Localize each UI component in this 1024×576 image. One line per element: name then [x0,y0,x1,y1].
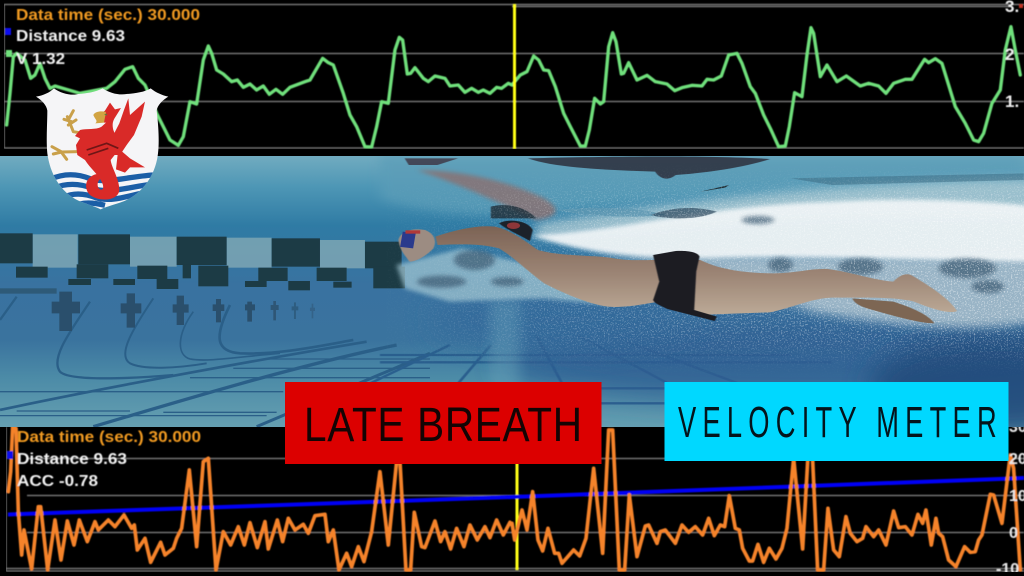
y axis labels: 0 [1009,525,1018,542]
shaft of light [490,300,520,390]
legend swatch: distance [7,451,13,459]
floor crosses [52,292,315,331]
lane rope light floats [33,234,365,268]
griffin hind fin [116,148,145,173]
corner marker [1019,4,1023,8]
readout: velocity: V 1.32 [16,51,65,68]
swim trunks [653,251,717,321]
acceleration curve [8,427,1020,570]
photo top edge [0,153,1024,156]
y axis labels [996,419,1024,576]
spray shadows [417,216,1004,293]
hand [398,229,435,262]
pool floor right side lines [370,344,737,404]
readout: distance: Distance 9.63 [17,451,127,468]
y axis labels [1005,0,1019,111]
pool floor and lane lines [0,297,430,427]
surface reflection and foam [380,155,1024,327]
distance line [8,478,1024,514]
top chart: velocity [0,0,1024,155]
readout: data time: Data time (sec.) 30.000 [16,7,200,24]
label: velocity meter [664,382,1008,461]
readout: distance: Distance 9.63 [16,28,125,45]
glove strap [400,232,416,248]
y axis labels: 2 [1005,45,1014,64]
photo: underwater swimmer [0,150,1024,435]
grid lines [4,4,1024,148]
legend swatch: velocity [6,50,12,57]
waves [50,175,153,205]
swimmer [398,221,957,323]
label: late breath: LATE BREATH [304,399,582,452]
water spray speckles [415,174,1024,369]
far leg [852,298,934,323]
velocity curve [7,27,1020,147]
griffin body, neck and tail [75,103,121,199]
head and cap [499,221,533,241]
griffin [52,98,145,199]
label: velocity meter: VELOCITY METER [678,397,997,447]
label: late breath [285,382,602,464]
legend swatch: distance [5,28,11,35]
readout: acceleration: ACC -0.78 [17,473,98,490]
griffin wings [110,98,145,155]
grid lines [6,427,1024,571]
time cursor [513,4,516,149]
deep water shadow [500,320,1024,404]
griffin beak [93,111,106,123]
body and near leg [435,226,957,315]
lane rope dark floats [0,233,405,294]
time cursor [516,460,518,570]
y axis labels: 1. [1005,92,1019,111]
readout: data time: Data time (sec.) 30.000 [17,429,201,446]
bottom chart: acceleration [0,419,1024,576]
griffin claws [52,111,83,159]
coat of arms shield [36,88,168,209]
